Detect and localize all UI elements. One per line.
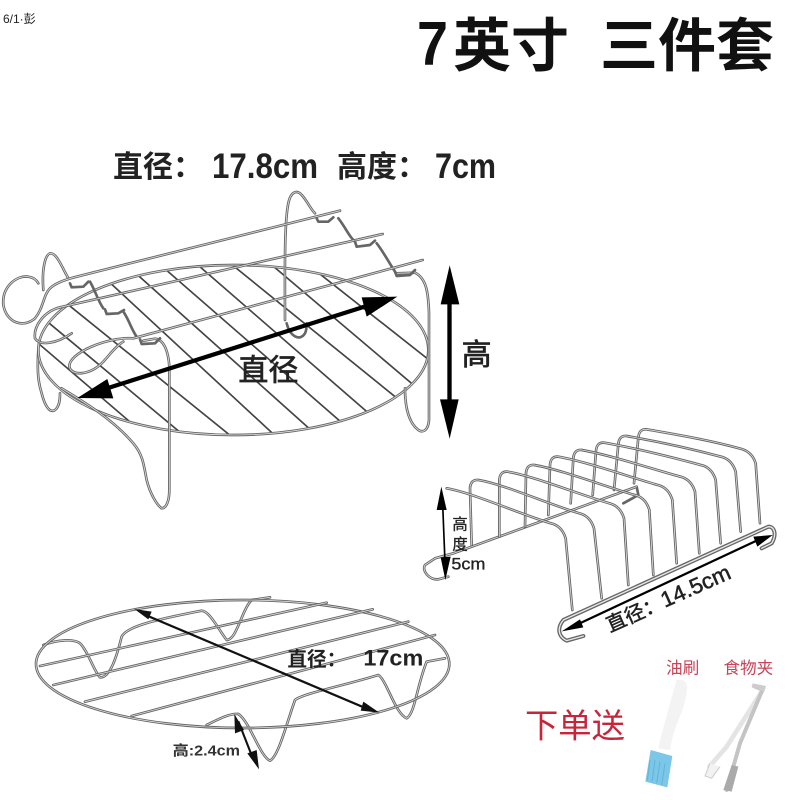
height label: 高:2.4cm bbox=[173, 741, 240, 759]
skewer rack illustration bbox=[3, 192, 492, 508]
outer ring bbox=[36, 600, 449, 728]
height arrow bbox=[437, 487, 451, 580]
food tongs label: 食物夹 bbox=[723, 658, 773, 677]
length label: 直径： bbox=[603, 591, 667, 637]
subtitle: dimensions of skewer rack: 直径： bbox=[113, 151, 203, 184]
rear legs bbox=[38, 192, 315, 411]
diameter label: 直径 bbox=[238, 355, 298, 388]
subtitle: dimensions of skewer rack: 高度： bbox=[337, 151, 427, 184]
icon: food tongs bbox=[705, 683, 766, 792]
parallel grill wires bbox=[40, 603, 435, 716]
title: 英寸 bbox=[453, 14, 569, 79]
toast rack illustration bbox=[424, 429, 775, 641]
height label: 高 bbox=[452, 516, 468, 533]
front rail with hooks bbox=[559, 527, 775, 641]
subtitle: dimensions of skewer rack: 7cm bbox=[435, 147, 496, 186]
watermark label: 6/1·彭 bbox=[3, 12, 36, 26]
height label bbox=[451, 516, 485, 574]
icon: silicone brush bbox=[645, 680, 687, 787]
height arrow bbox=[234, 714, 259, 769]
base rear rail bbox=[424, 487, 638, 579]
nine arched dividers bbox=[447, 429, 760, 610]
height label: 5cm bbox=[451, 555, 485, 574]
diameter label bbox=[287, 645, 423, 671]
title: 7 bbox=[417, 10, 448, 79]
low round rack illustration bbox=[36, 597, 449, 769]
diameter arrow bbox=[134, 609, 379, 713]
title: 三件套 bbox=[600, 14, 774, 79]
length label: 14.5cm bbox=[657, 560, 734, 612]
title bbox=[417, 10, 774, 79]
legs under the ring bbox=[43, 597, 445, 761]
free gifts bbox=[525, 658, 773, 792]
diameter label: 直径： bbox=[287, 649, 346, 671]
rack grid wires bbox=[40, 266, 426, 434]
oil brush label: 油刷 bbox=[666, 658, 699, 677]
height arrow bbox=[440, 265, 459, 439]
free gift heading: 下单送 bbox=[525, 708, 625, 745]
height label: 高 bbox=[462, 339, 492, 372]
length label bbox=[602, 560, 734, 637]
subtitle: dimensions of skewer rack: 17.8cm bbox=[212, 147, 318, 186]
subtitle: dimensions of skewer rack bbox=[113, 147, 496, 186]
height label: 度 bbox=[452, 536, 468, 553]
diameter label: 17cm bbox=[363, 645, 423, 670]
front and right legs bbox=[62, 218, 429, 508]
length arrow bbox=[562, 535, 773, 631]
three skewers with loop handles bbox=[3, 211, 423, 373]
diameter arrow bbox=[77, 297, 397, 398]
rack ring bbox=[38, 265, 428, 435]
